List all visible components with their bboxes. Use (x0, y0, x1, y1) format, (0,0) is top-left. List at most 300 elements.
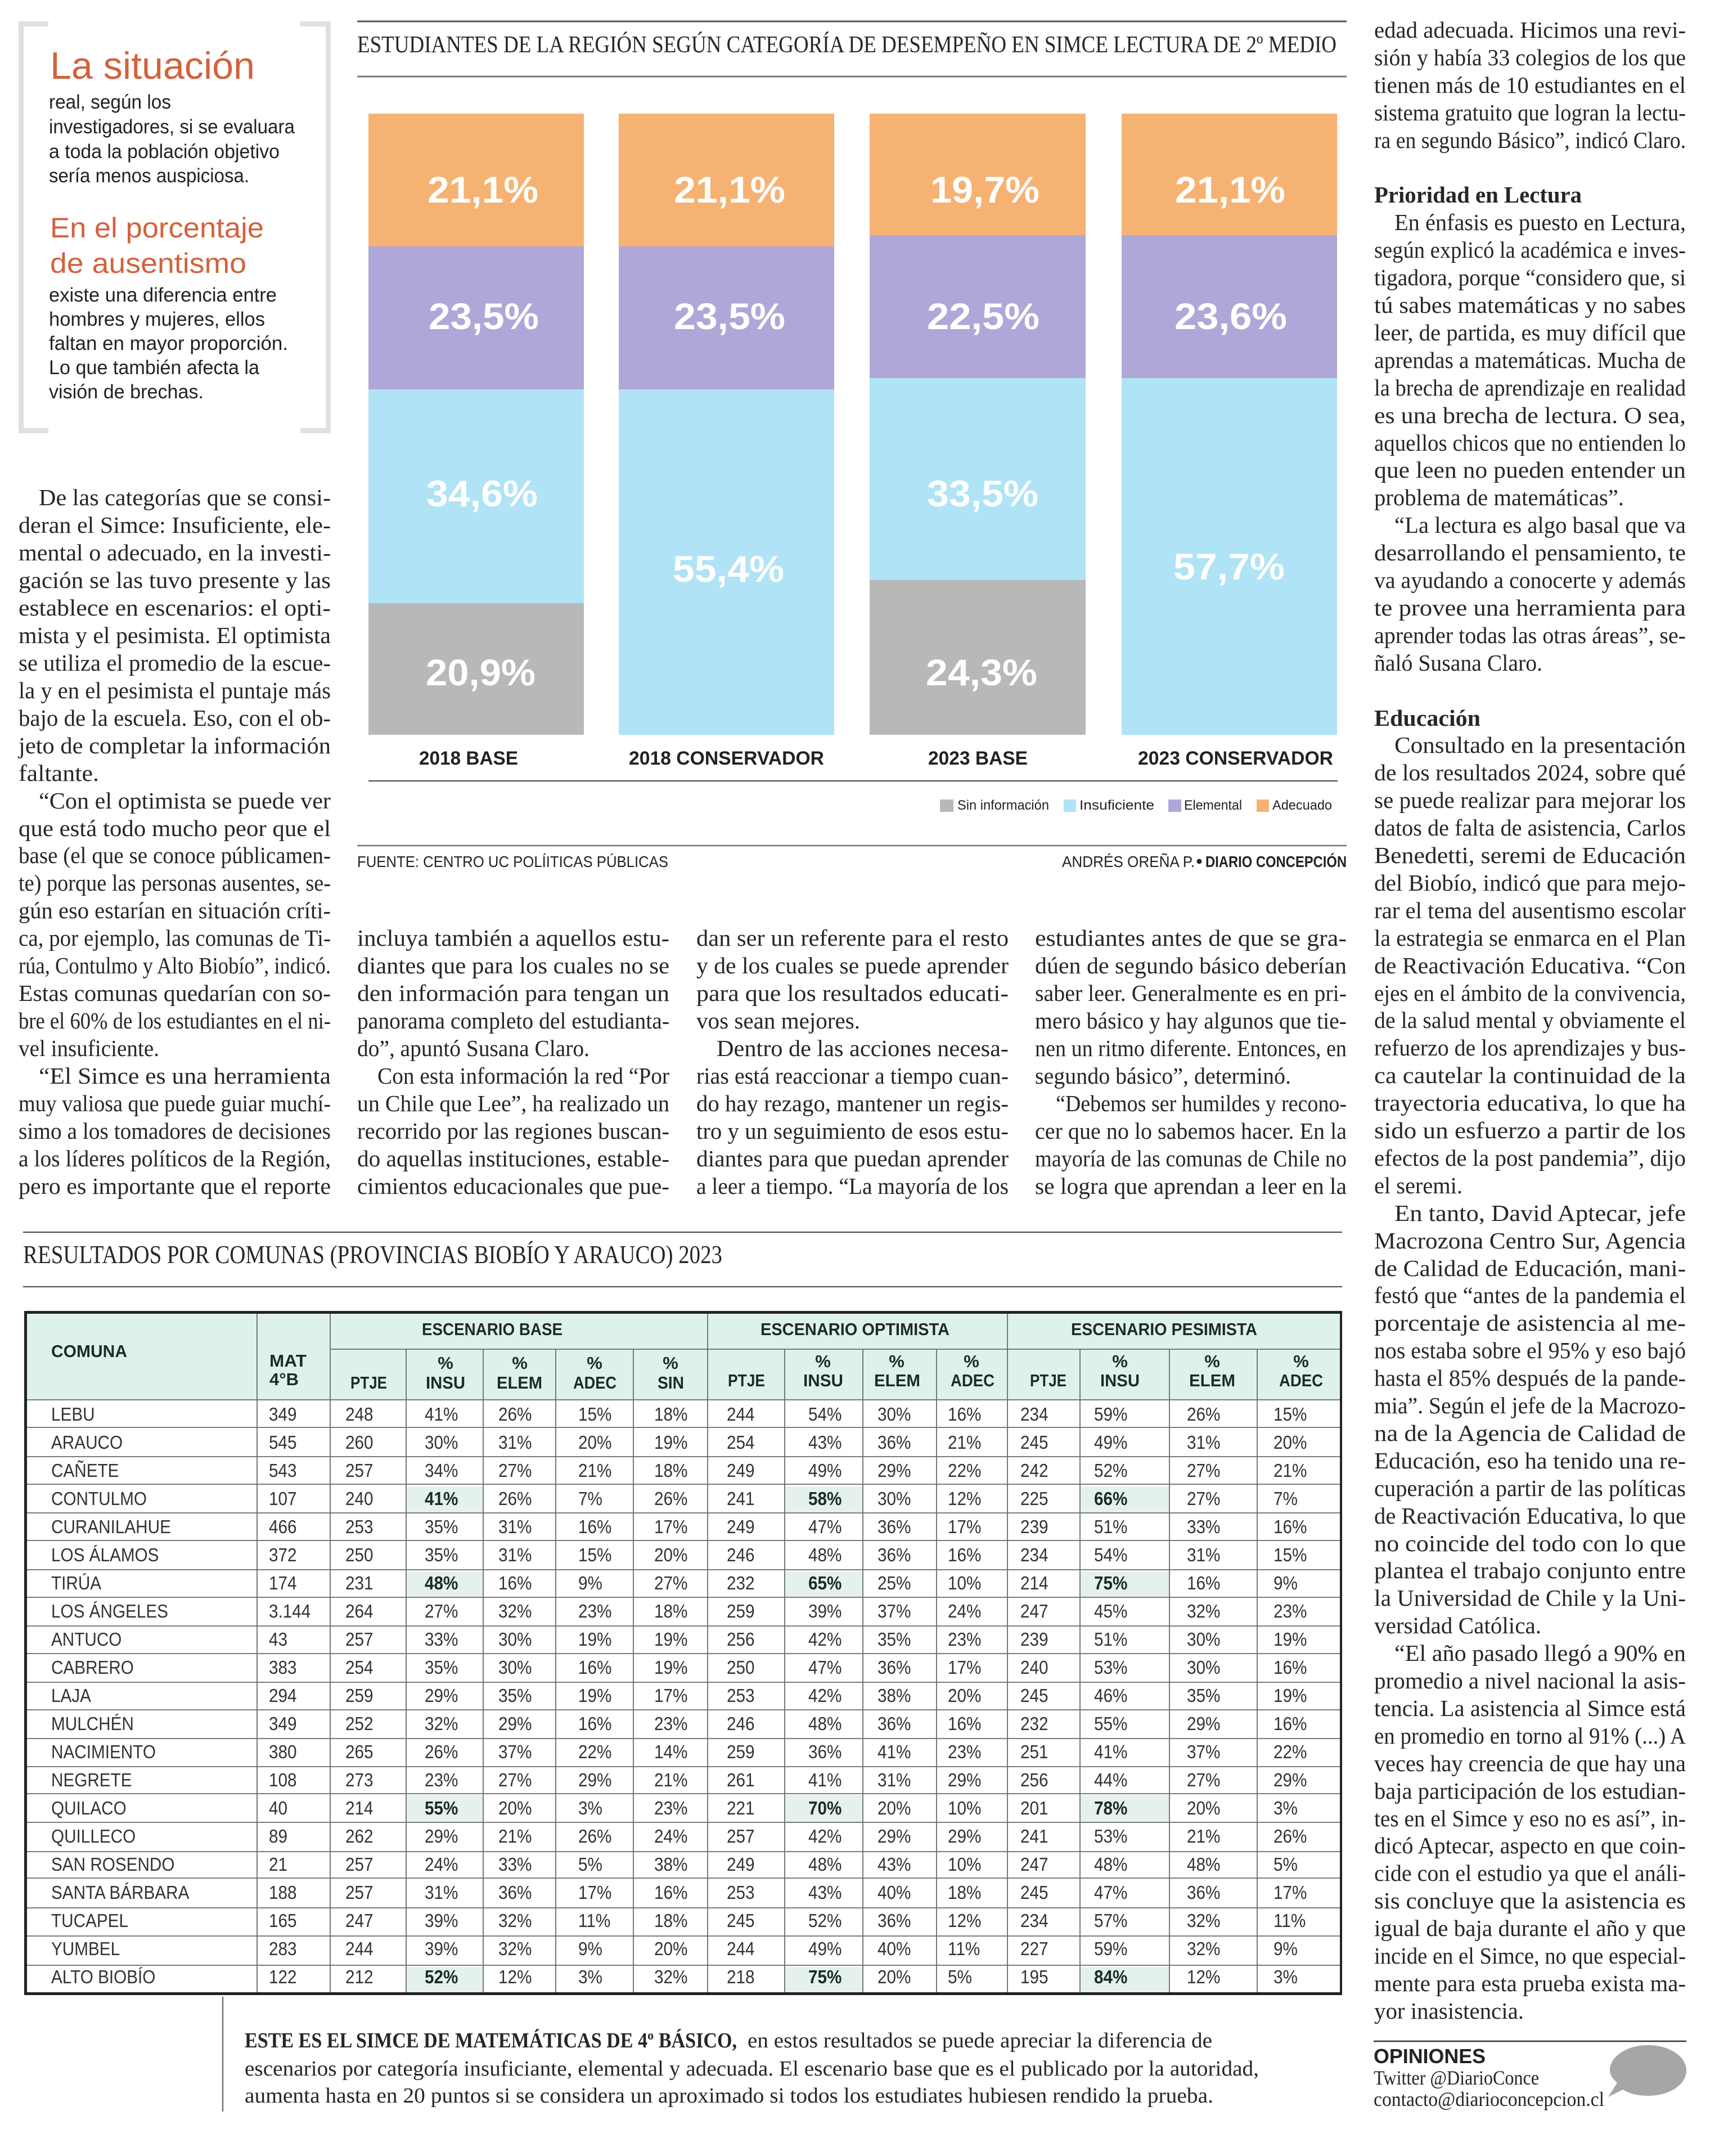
row: Lebu: 30% (878, 1404, 911, 1425)
row: Quilaco: 23% (654, 1798, 687, 1818)
heading: La situación: La situación (50, 44, 255, 87)
row: Nacimiento: 23% (948, 1741, 981, 1762)
text block: article right column: en promedio en torno al 91% (...) A (1374, 1723, 1686, 1749)
row: Contulmo: 7% (1274, 1488, 1298, 1509)
row: San Rosendo: 48% (1187, 1854, 1220, 1875)
table header: COMUNA (51, 1341, 127, 1361)
row: Santa Bárbara: 18% (948, 1882, 981, 1903)
text block: article right column: según explicó la académica e inves- (1374, 237, 1686, 263)
row: Los Ángeles: 259 (727, 1601, 755, 1622)
row: Tucapel: 247 (345, 1910, 374, 1931)
table header: % (889, 1351, 904, 1371)
row: Antuco: 30% (498, 1629, 532, 1650)
row: San Rosendo (51, 1854, 1298, 1875)
row: Laja: 259 (345, 1685, 374, 1706)
text block: article middle column 2: para que los resultados educati- (696, 980, 1009, 1006)
row: Lebu: 18% (654, 1404, 687, 1425)
text block: article middle column 3: segundo básico”, determinó. (1035, 1063, 1291, 1089)
row: Nacimiento: 259 (727, 1741, 755, 1762)
text block: article middle column 1: diantes que para los cuales no se (357, 953, 669, 978)
row: Mulchén: 232 (1020, 1713, 1048, 1734)
row: Santa Bárbara: 36% (1187, 1882, 1220, 1903)
row: Quilleco: 21% (498, 1826, 532, 1847)
bar: 2023 CONSERVADOR: 23,6% (1174, 295, 1287, 337)
row: Tirúa: 232 (727, 1573, 755, 1593)
row: Negrete: 29% (948, 1769, 981, 1790)
row: Contulmo: 30% (878, 1488, 911, 1509)
row: Laja: 35% (1187, 1685, 1220, 1706)
row: Quilleco: 257 (727, 1826, 755, 1847)
row: Mulchén: 29% (498, 1713, 532, 1734)
row: Quilaco: 221 (727, 1798, 755, 1818)
text block: article right column: plantea el trabajo conjunto entre (1374, 1557, 1686, 1583)
row: Negrete: 108 (269, 1769, 297, 1790)
row: Yumbel: 227 (1020, 1938, 1048, 1959)
text block: article right column: te provee una herramienta para (1374, 595, 1686, 621)
row: Nacimiento: 22% (578, 1741, 611, 1762)
table header: 4°B (269, 1369, 299, 1389)
row: Quilaco: 55% (425, 1798, 458, 1818)
note: Simce de matemáticas: en estos resultados se puede apreciar la diferencia de (748, 2029, 1212, 2052)
heading: chart title: ESTUDIANTES DE LA REGIÓN SEGÚN CATEGORÍA DE DESEMPEÑO EN SIMCE LECTURA DE 2º MEDIO (357, 32, 1336, 58)
legend: Elemental (1184, 798, 1242, 813)
text block: article right column: trayectoria educativa, lo que ha (1374, 1090, 1686, 1116)
text block: article right column: porcentaje de asistencia al me- (1374, 1310, 1686, 1336)
text block: article middle column 1: do aquellas instituciones, estable- (357, 1146, 669, 1171)
text block: article right column: tencia. La asistencia al Simce está (1374, 1695, 1686, 1721)
text block: article middle column 2: rias está reaccionar a tiempo cuan- (696, 1063, 1009, 1089)
row: Contulmo: 26% (498, 1488, 532, 1509)
row: Alto Biobío: 3% (1274, 1966, 1298, 1987)
row: Santa Bárbara: 245 (1020, 1882, 1048, 1903)
row: Tirúa: 9% (1274, 1573, 1298, 1593)
row: Yumbel: YUMBEL (51, 1938, 120, 1959)
row: Antuco: 23% (948, 1629, 981, 1650)
row: Los Álamos: 48% (808, 1544, 842, 1565)
row: Quilaco (51, 1798, 1298, 1818)
row: Laja: 38% (878, 1685, 911, 1706)
row: Contulmo: 107 (269, 1488, 297, 1509)
row: Cañete: 18% (654, 1460, 687, 1481)
row: Quilleco: 26% (1274, 1826, 1307, 1847)
text block: article right column: el seremi. (1374, 1173, 1462, 1198)
row: Yumbel: 11% (948, 1938, 980, 1959)
row: Antuco: 43 (269, 1629, 287, 1650)
row: Curanilahue: 51% (1094, 1516, 1127, 1537)
row: Laja: 294 (269, 1685, 297, 1706)
row: Negrete: 27% (1187, 1769, 1220, 1790)
row: Tucapel: 36% (878, 1910, 911, 1931)
row: Lebu: 349 (269, 1404, 297, 1425)
row: Nacimiento: 265 (345, 1741, 374, 1762)
row: Quilleco: 53% (1094, 1826, 1127, 1847)
row: Quilleco: 29% (425, 1826, 458, 1847)
row: Yumbel: 39% (425, 1938, 458, 1959)
text block: article left column: ca, por ejemplo, las comunas de Ti- (19, 925, 331, 951)
table header: SIN (658, 1373, 684, 1393)
text block: article right column: nos estaba sobre el 95% y eso bajó (1374, 1337, 1686, 1363)
row: Alto Biobío: 52% (425, 1966, 458, 1987)
row: Curanilahue: 16% (1274, 1516, 1307, 1537)
row: Quilleco: QUILLECO (51, 1826, 136, 1847)
row: Laja: 42% (808, 1685, 842, 1706)
row: Tirúa: 174 (269, 1573, 297, 1593)
row: Arauco: 21% (948, 1432, 981, 1453)
row: Arauco: ARAUCO (51, 1432, 123, 1453)
row: Los Ángeles: 3.144 (269, 1601, 310, 1622)
row: Los Ángeles: 23% (578, 1601, 611, 1622)
row: Yumbel: 32% (498, 1938, 532, 1959)
text block: article right column: dicó Aptecar, aspecto en que coin- (1374, 1832, 1686, 1858)
row: Curanilahue: 36% (878, 1516, 911, 1537)
row: Quilaco: 20% (878, 1798, 911, 1818)
row: Quilaco: 201 (1020, 1798, 1048, 1818)
row: Nacimiento: 37% (498, 1741, 532, 1762)
text block: article right column: rar el tema del ausentismo escolar (1374, 897, 1686, 923)
text block: article left column: establece en escenarios: el opti- (19, 595, 331, 621)
text block: article right column: efectos de la post pandemia”, dijo (1374, 1145, 1686, 1171)
row: Lebu (51, 1404, 1307, 1425)
row: Negrete: 41% (808, 1769, 842, 1790)
row: Negrete: 261 (727, 1769, 755, 1790)
row: Antuco: ANTUCO (51, 1629, 122, 1650)
row: Tirúa: 27% (654, 1573, 687, 1593)
row: Mulchén: 246 (727, 1713, 755, 1734)
legend (940, 798, 1332, 813)
row: Yumbel: 59% (1094, 1938, 1127, 1959)
text block: article left column: faltante. (19, 760, 99, 786)
row: Quilaco: 20% (1187, 1798, 1220, 1818)
row: Nacimiento: 36% (808, 1741, 842, 1762)
text block: article right column: Educación (1374, 705, 1480, 731)
text block: article left column: te) porque las personas ausentes, se- (19, 870, 331, 896)
row: San Rosendo: 5% (578, 1854, 602, 1875)
text block: article right column: del Biobío, indicó que para mejo- (1374, 870, 1686, 896)
row: Santa Bárbara: 257 (345, 1882, 374, 1903)
text block: article middle column 3: mayoría de las comunas de Chile no (1035, 1146, 1347, 1171)
text block: article middle column 2 (696, 925, 1009, 1199)
text block: article right column: la Universidad de Chile y la Uni- (1374, 1585, 1686, 1611)
text block: article left column: gún eso estarían en situación críti- (19, 897, 331, 923)
text block: article middle column 3: cer que no lo sabemos hacer. En la (1035, 1118, 1347, 1144)
text block: article middle column 3: mero básico y hay algunos que tie- (1035, 1008, 1347, 1034)
row: Los Álamos: 246 (727, 1544, 755, 1565)
text block: article right column: mia”. Según el jefe de la Macrozo- (1374, 1393, 1686, 1418)
text block: article left column: bre el 60% de los estudiantes en el ni- (19, 1008, 331, 1034)
table header: PTJE (1030, 1371, 1066, 1390)
text block: article left column: Estas comunas quedarían con so- (19, 980, 331, 1006)
row: Quilleco: 21% (1187, 1826, 1220, 1847)
text block: article right column: tes en el Simce y eso no es así”, in- (1374, 1805, 1686, 1831)
text block: article middle column 3: dúen de segundo básico deberían (1035, 953, 1347, 978)
text block: article right column: promedio a nivel nacional la asis- (1374, 1668, 1686, 1694)
row: Cañete: 249 (727, 1460, 755, 1481)
source credits: FUENTE: CENTRO UC POLÍITICAS PÚBLICAS (357, 853, 668, 870)
bar: 2018 CONSERVADOR: 21,1% (674, 169, 785, 210)
row: Yumbel: 49% (808, 1938, 842, 1959)
row: Antuco: 256 (727, 1629, 755, 1650)
row: Curanilahue: 33% (1187, 1516, 1220, 1537)
row: Cañete: 543 (269, 1460, 297, 1481)
footer: opiniones (1374, 2041, 1686, 2110)
row: Laja: 19% (1274, 1685, 1307, 1706)
row: Los Álamos: LOS ÁLAMOS (51, 1544, 159, 1565)
table header (51, 1319, 1323, 1393)
text block: article right column: ca cautelar la continuidad de la (1374, 1062, 1686, 1088)
bar: 2018 CONSERVADOR (619, 114, 834, 735)
row: Los Ángeles: 27% (425, 1601, 458, 1622)
text block: article right column: En énfasis es puesto en Lectura, (1394, 209, 1686, 235)
text block: article middle column 3: nen un ritmo diferente. Entonces, en (1035, 1035, 1347, 1061)
text block: article middle column 1: den información para tengan un (357, 980, 669, 1006)
table header: MAT (269, 1351, 307, 1371)
text block: article right column: Consultado en la presentación (1394, 732, 1686, 758)
row: Tucapel: TUCAPEL (51, 1910, 128, 1931)
table header: % (964, 1351, 979, 1371)
row: San Rosendo: SAN ROSENDO (51, 1854, 174, 1875)
row: Cabrero: 17% (948, 1657, 981, 1678)
text block: ausentismo: visión de brechas. (49, 381, 204, 403)
legend: Insuficiente (1079, 798, 1154, 813)
row: Quilaco: 214 (345, 1798, 374, 1818)
bar: 2023 CONSERVADOR: 21,1% (1175, 169, 1285, 210)
row: Laja: 19% (578, 1685, 611, 1706)
row: Santa Bárbara: 47% (1094, 1882, 1127, 1903)
row: Nacimiento: 26% (425, 1741, 458, 1762)
text block: article right column: de la salud mental y obviamente el (1374, 1007, 1686, 1033)
row: Tirúa: 16% (498, 1573, 532, 1593)
text block: article right column: ejes en el ámbito de la convivencia, (1374, 980, 1686, 1006)
row: Quilleco: 89 (269, 1826, 287, 1847)
row: Los Ángeles: 18% (654, 1601, 687, 1622)
row: Negrete: 23% (425, 1769, 458, 1790)
row: San Rosendo: 48% (1094, 1854, 1127, 1875)
row: Quilaco: 3% (578, 1798, 602, 1818)
row: Santa Bárbara (51, 1882, 1307, 1903)
bar: 2023 BASE: 33,5% (927, 473, 1038, 514)
row: Yumbel: 40% (878, 1938, 911, 1959)
note: Simce de matemáticas (223, 1997, 1259, 2112)
row: Alto Biobío: 84% (1094, 1966, 1127, 1987)
text block: article right column: ñaló Susana Claro. (1374, 650, 1542, 676)
row: Antuco: 19% (578, 1629, 611, 1650)
row: Santa Bárbara: SANTA BÁRBARA (51, 1882, 189, 1903)
bar: 2018 BASE (368, 114, 584, 735)
row: Arauco: 49% (1094, 1432, 1127, 1453)
row: Lebu: 26% (498, 1404, 532, 1425)
row: Arauco (51, 1432, 1307, 1453)
row: Nacimiento: 41% (1094, 1741, 1127, 1762)
row: Negrete: 44% (1094, 1769, 1127, 1790)
text block: article right column: aprender todas las otras áreas”, se- (1374, 622, 1686, 648)
text block: article right column: problema de matemáticas”. (1374, 484, 1624, 510)
row: Los Ángeles: 247 (1020, 1601, 1048, 1622)
row: Santa Bárbara: 36% (498, 1882, 532, 1903)
row: Quilaco: 20% (498, 1798, 532, 1818)
row: Laja: 35% (498, 1685, 532, 1706)
row: Los Ángeles: 23% (1274, 1601, 1307, 1622)
row: Antuco: 51% (1094, 1629, 1127, 1650)
row: Contulmo: 66% (1094, 1488, 1127, 1509)
text block: article right column: de Reactivación Educativa, lo que (1374, 1503, 1686, 1529)
row: Curanilahue: 249 (727, 1516, 755, 1537)
row: Tucapel: 57% (1094, 1910, 1127, 1931)
text block: article left column: rúa, Contulmo y Alto Biobío”, indicó. (19, 953, 331, 978)
row: Cañete: CAÑETE (51, 1460, 119, 1481)
axis labels: 2018 CONSERVADOR (629, 748, 824, 769)
row: Contulmo: 58% (808, 1488, 842, 1509)
row: Cabrero: CABRERO (51, 1657, 134, 1678)
row: Quilaco: 78% (1094, 1798, 1127, 1818)
row: Contulmo: 27% (1187, 1488, 1220, 1509)
row: Los Álamos: 234 (1020, 1544, 1048, 1565)
text block: article left column: simo a los tomadores de decisiones (19, 1118, 331, 1144)
row: Cabrero: 53% (1094, 1657, 1127, 1678)
row: Cabrero: 36% (878, 1657, 911, 1678)
text block: article right column: Prioridad en Lectura (1374, 182, 1582, 208)
row: Cañete: 21% (578, 1460, 611, 1481)
text block: article middle column 1: incluya también a aquellos estu- (357, 925, 669, 951)
row: Cañete: 27% (1187, 1460, 1220, 1481)
row: Los Ángeles: 37% (878, 1601, 911, 1622)
row: Los Álamos: 31% (1187, 1544, 1220, 1565)
row: Cabrero: 30% (498, 1657, 532, 1678)
text block: article right column: desarrollando el pensamiento, te (1374, 540, 1686, 565)
row: Contulmo: 240 (345, 1488, 374, 1509)
row: Alto Biobío: 75% (808, 1966, 842, 1987)
row: Los Ángeles: 39% (808, 1601, 842, 1622)
row: Cabrero: 254 (345, 1657, 374, 1678)
row: Alto Biobío: 5% (948, 1966, 972, 1987)
text block: article left column: la y en el pesimista el puntaje más (19, 677, 331, 703)
text block: article middle column 2: tro y un seguimiento de esos estu- (696, 1118, 1009, 1144)
axis labels: 2023 BASE (928, 748, 1028, 769)
row: Santa Bárbara: 31% (425, 1882, 458, 1903)
row: Mulchén: 36% (878, 1713, 911, 1734)
row: Laja: 253 (727, 1685, 755, 1706)
row: Tucapel: 32% (498, 1910, 532, 1931)
text block: article left column: “Con el optimista se puede ver (39, 788, 331, 814)
text block: article right column: veces hay creencia de que hay una (1374, 1750, 1686, 1776)
row: San Rosendo: 5% (1274, 1854, 1298, 1875)
row: Los Ángeles: 45% (1094, 1601, 1127, 1622)
row: Santa Bárbara: 188 (269, 1882, 297, 1903)
row: Los Álamos: 250 (345, 1544, 374, 1565)
row: San Rosendo: 247 (1020, 1854, 1048, 1875)
text block: article middle column 1 (357, 925, 669, 1199)
row: Arauco: 43% (808, 1432, 842, 1453)
row: Laja: 46% (1094, 1685, 1127, 1706)
text block: article left column: “El Simce es una herramienta (39, 1063, 331, 1089)
text block: article right column: na de la Agencia de Calidad de (1374, 1420, 1686, 1446)
text block: article right column: es una brecha de lectura. O sea, (1374, 402, 1686, 428)
row: Tucapel: 11% (578, 1910, 610, 1931)
table header: % (1112, 1351, 1128, 1371)
row: Alto Biobío: 12% (498, 1966, 532, 1987)
bar: 2018 CONSERVADOR: 55,4% (673, 548, 784, 590)
heading: En el porcentaje de ausentismo (50, 212, 264, 279)
row: Mulchén: 29% (1187, 1713, 1220, 1734)
row: Los Ángeles: 24% (948, 1601, 981, 1622)
bar: 2018 BASE: 21,1% (428, 169, 538, 210)
row: Quilleco: 42% (808, 1826, 842, 1847)
row: Contulmo: 7% (578, 1488, 602, 1509)
row: Laja: 245 (1020, 1685, 1048, 1706)
row: Yumbel: 9% (1274, 1938, 1298, 1959)
text block: article middle column 2: dan ser un referente para el resto (696, 925, 1009, 951)
text block: article left column: jeto de completar la información (17, 733, 331, 758)
row: Quilaco: 70% (808, 1798, 842, 1818)
text block: article right column: se puede realizar para mejorar los (1374, 787, 1686, 813)
table header: % (663, 1353, 678, 1373)
row: Laja: 29% (425, 1685, 458, 1706)
table header: ADEC (951, 1371, 994, 1390)
text block: article middle column 2: vos sean mejores. (696, 1008, 860, 1034)
row: Lebu: 54% (808, 1404, 842, 1425)
text block: article right column: que leen no pueden entender un (1374, 457, 1686, 483)
text block: article right column: festó que “antes de la pandemia el (1374, 1282, 1686, 1308)
text block: article middle column 3: se logra que aprendan a leer en la (1035, 1173, 1347, 1199)
row: Curanilahue: 17% (948, 1516, 981, 1537)
row: San Rosendo: 10% (948, 1854, 981, 1875)
text block: article right column: edad adecuada. Hicimos una revi- (1374, 17, 1686, 43)
row: Los Álamos: 36% (878, 1544, 911, 1565)
row: Cabrero: 19% (654, 1657, 687, 1678)
row: Quilleco (51, 1826, 1307, 1847)
row: Contulmo: 41% (425, 1488, 458, 1509)
row: Yumbel: 9% (578, 1938, 602, 1959)
row: Negrete: 27% (498, 1769, 532, 1790)
note: Simce de matemáticas: escenarios por categoría insuficiante, elemental y adecuada. El escenario base que es el publicado por la autoridad, (245, 2057, 1259, 2081)
row: Nacimiento: 22% (1274, 1741, 1307, 1762)
heading: En el porcentaje de ausentismo: En el porcentaje (50, 212, 264, 244)
panel: callout La situación (21, 24, 328, 431)
text block: article left column (17, 484, 331, 1199)
row: Laja: 17% (654, 1685, 687, 1706)
row: Arauco: 20% (578, 1432, 611, 1453)
row: Nacimiento (51, 1741, 1307, 1762)
row: Negrete: 256 (1020, 1769, 1048, 1790)
row: Tirúa: TIRÚA (51, 1573, 101, 1593)
source credits (357, 846, 1347, 870)
text block: article left column: bajo de la escuela. Eso, con el ob- (19, 705, 331, 731)
row: Quilleco: 241 (1020, 1826, 1048, 1847)
text block: article right column: Educación, eso ha tenido una re- (1374, 1448, 1686, 1474)
text block: article left column: base (el que se conoce públicamen- (19, 842, 331, 868)
bar: 2018 CONSERVADOR: 23,5% (674, 295, 785, 337)
row: Tucapel: 245 (727, 1910, 755, 1931)
row: Alto Biobío: 12% (1187, 1966, 1220, 1987)
text block: article right column: igual de baja durante el año y que (1374, 1915, 1686, 1941)
row: Tirúa: 214 (1020, 1573, 1048, 1593)
row: Mulchén: 32% (425, 1713, 458, 1734)
bar: 2023 BASE: 22,5% (927, 295, 1040, 337)
text block: article right column: Macrozona Centro Sur, Agencia (1374, 1228, 1686, 1254)
row: Lebu: 26% (1187, 1404, 1220, 1425)
row: Antuco: 19% (1274, 1629, 1307, 1650)
row: Tirúa: 25% (878, 1573, 911, 1593)
text block: article right column: sido un esfuerzo a partir de los (1374, 1117, 1686, 1143)
row: Mulchén: 349 (269, 1713, 297, 1734)
row: Negrete (51, 1769, 1307, 1790)
row: Nacimiento: 380 (269, 1741, 297, 1762)
row: Mulchén (51, 1713, 1307, 1734)
row: Curanilahue: 31% (498, 1516, 532, 1537)
row: Los Álamos (51, 1544, 1307, 1565)
row: Mulchén: 16% (1274, 1713, 1307, 1734)
row: Cabrero: 47% (808, 1657, 842, 1678)
row: San Rosendo: 249 (727, 1854, 755, 1875)
